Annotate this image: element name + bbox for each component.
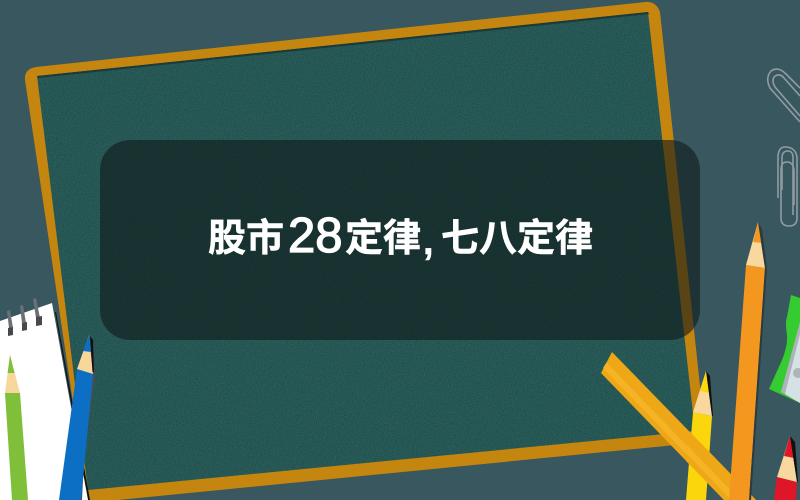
blue pencil: [59, 335, 95, 500]
orange pencil: [729, 222, 767, 500]
title: 28: [288, 209, 343, 263]
title: 定律: [345, 218, 421, 260]
spiral binding: [7, 298, 42, 336]
title: 七八定律: [441, 218, 593, 260]
ruler front segment: [686, 432, 756, 500]
red pencil: [774, 436, 798, 500]
yellow pencil: [686, 371, 713, 500]
title: 股市: [208, 218, 284, 260]
notebook: [0, 298, 90, 500]
dark title panel: [100, 140, 700, 340]
ruler: [601, 352, 756, 500]
title: ,: [423, 221, 434, 263]
sharpener: [769, 295, 800, 403]
paperclip: upper: [768, 69, 800, 122]
green pencil: [5, 355, 28, 500]
paperclip: lower: [778, 147, 797, 226]
title: [208, 209, 593, 263]
